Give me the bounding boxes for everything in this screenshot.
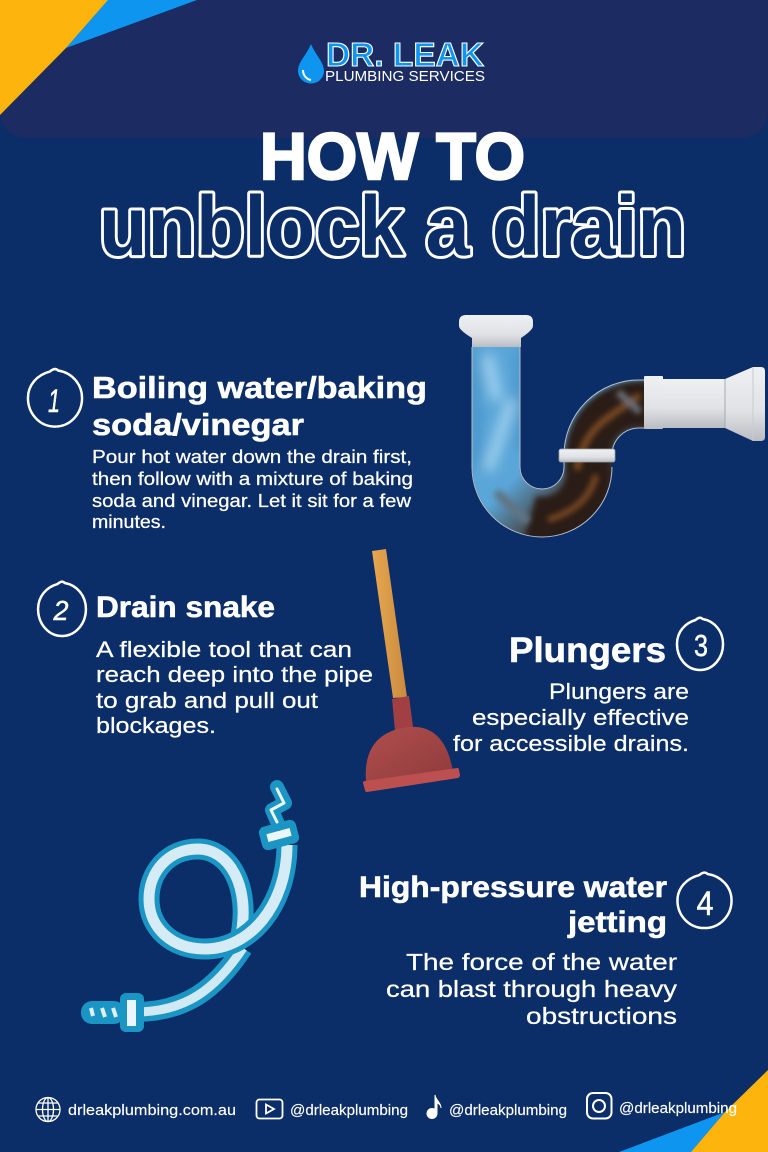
title line 1: HOW TO bbox=[260, 119, 525, 193]
logo bbox=[298, 36, 485, 85]
body step 3: especially effective bbox=[472, 705, 689, 730]
number badge 3: 3 bbox=[694, 628, 708, 663]
music handle: @drleakplumbing bbox=[449, 1102, 567, 1119]
header band bbox=[0, 0, 768, 138]
plunger cup bbox=[366, 727, 453, 782]
body step 1: Pour hot water down the drain first, bbox=[92, 447, 412, 467]
body step 1: then follow with a mixture of baking bbox=[92, 469, 413, 489]
number badge 1 bbox=[28, 369, 82, 427]
body step 3: Plungers are bbox=[549, 679, 689, 704]
body step 2: reach deep into the pipe bbox=[96, 662, 373, 687]
illustration: P-trap pipe bbox=[459, 315, 765, 538]
icon: music note bbox=[426, 1095, 441, 1119]
panel: step 3 bbox=[453, 618, 723, 756]
plunger neck bbox=[392, 696, 413, 731]
body step 2: to grab and pull out bbox=[96, 688, 318, 713]
corner accent: top left bbox=[0, 0, 197, 115]
plunger handle bbox=[372, 549, 407, 698]
panel: step 4 bbox=[359, 871, 732, 1029]
icon: camera bbox=[587, 1093, 612, 1118]
illustration: hose bbox=[81, 787, 300, 1032]
title bbox=[99, 119, 686, 273]
number badge 3 bbox=[677, 618, 723, 670]
heading step 4: High-pressure water bbox=[359, 871, 667, 904]
hose head connector bbox=[258, 818, 300, 852]
icon: globe bbox=[36, 1098, 60, 1122]
heading step 4 line 2: jetting bbox=[567, 906, 667, 939]
number badge 4: 4 bbox=[696, 885, 714, 923]
body step 1 bbox=[92, 447, 413, 532]
body step 4 bbox=[386, 949, 678, 1029]
body step 4: The force of the water bbox=[406, 949, 677, 975]
illustration: plunger bbox=[363, 549, 460, 792]
website: drleakplumbing.com.au bbox=[68, 1102, 236, 1119]
body step 2: A flexible tool that can bbox=[96, 637, 352, 662]
body step 2: blockages. bbox=[96, 713, 216, 738]
number badge 2 bbox=[38, 582, 86, 636]
logo name: DR. LEAK bbox=[326, 36, 484, 73]
hose loop bbox=[149, 845, 287, 949]
camera handle: @drleakplumbing bbox=[619, 1100, 737, 1117]
icon: water drop bbox=[298, 44, 324, 84]
icon: video bbox=[256, 1100, 282, 1118]
number badge 2: 2 bbox=[53, 595, 69, 626]
outlet tube bbox=[644, 367, 765, 441]
number badge 1: 1 bbox=[48, 383, 60, 419]
hose tail connector bbox=[120, 993, 144, 1032]
footer contact row bbox=[36, 1093, 737, 1122]
heading step 2: Drain snake bbox=[96, 591, 275, 624]
logo tagline: PLUMBING SERVICES bbox=[325, 68, 485, 85]
plunger rim bbox=[363, 768, 460, 792]
heading step 1 line 2: soda/vinegar bbox=[92, 407, 304, 442]
panel: step 1 bbox=[28, 369, 427, 532]
hose lower segment bbox=[135, 948, 243, 1012]
body step 1: minutes. bbox=[92, 512, 166, 532]
body step 4: obstructions bbox=[526, 1003, 677, 1029]
heading step 3: Plungers bbox=[509, 631, 666, 670]
top flange bbox=[459, 315, 533, 347]
hose tail tip bbox=[81, 1001, 125, 1024]
body step 1: soda and vinegar. Let it sit for a few bbox=[92, 491, 412, 511]
hose head zigzag bbox=[271, 787, 285, 824]
corner accent: bottom right bbox=[619, 1070, 768, 1152]
clamp band bbox=[559, 449, 615, 462]
body step 2 bbox=[96, 637, 373, 738]
heading step 1: Boiling water/baking bbox=[92, 370, 427, 405]
number badge 4 bbox=[677, 873, 732, 928]
pipe body bbox=[472, 347, 644, 536]
body step 3 bbox=[453, 679, 689, 756]
video handle: @drleakplumbing bbox=[290, 1102, 408, 1119]
pipe outline bbox=[472, 347, 646, 537]
panel: step 2 bbox=[38, 582, 373, 738]
body step 4: can blast through heavy bbox=[386, 976, 678, 1002]
body step 3: for accessible drains. bbox=[453, 731, 689, 756]
title line 2 outlined: unblock a drain bbox=[99, 179, 686, 273]
